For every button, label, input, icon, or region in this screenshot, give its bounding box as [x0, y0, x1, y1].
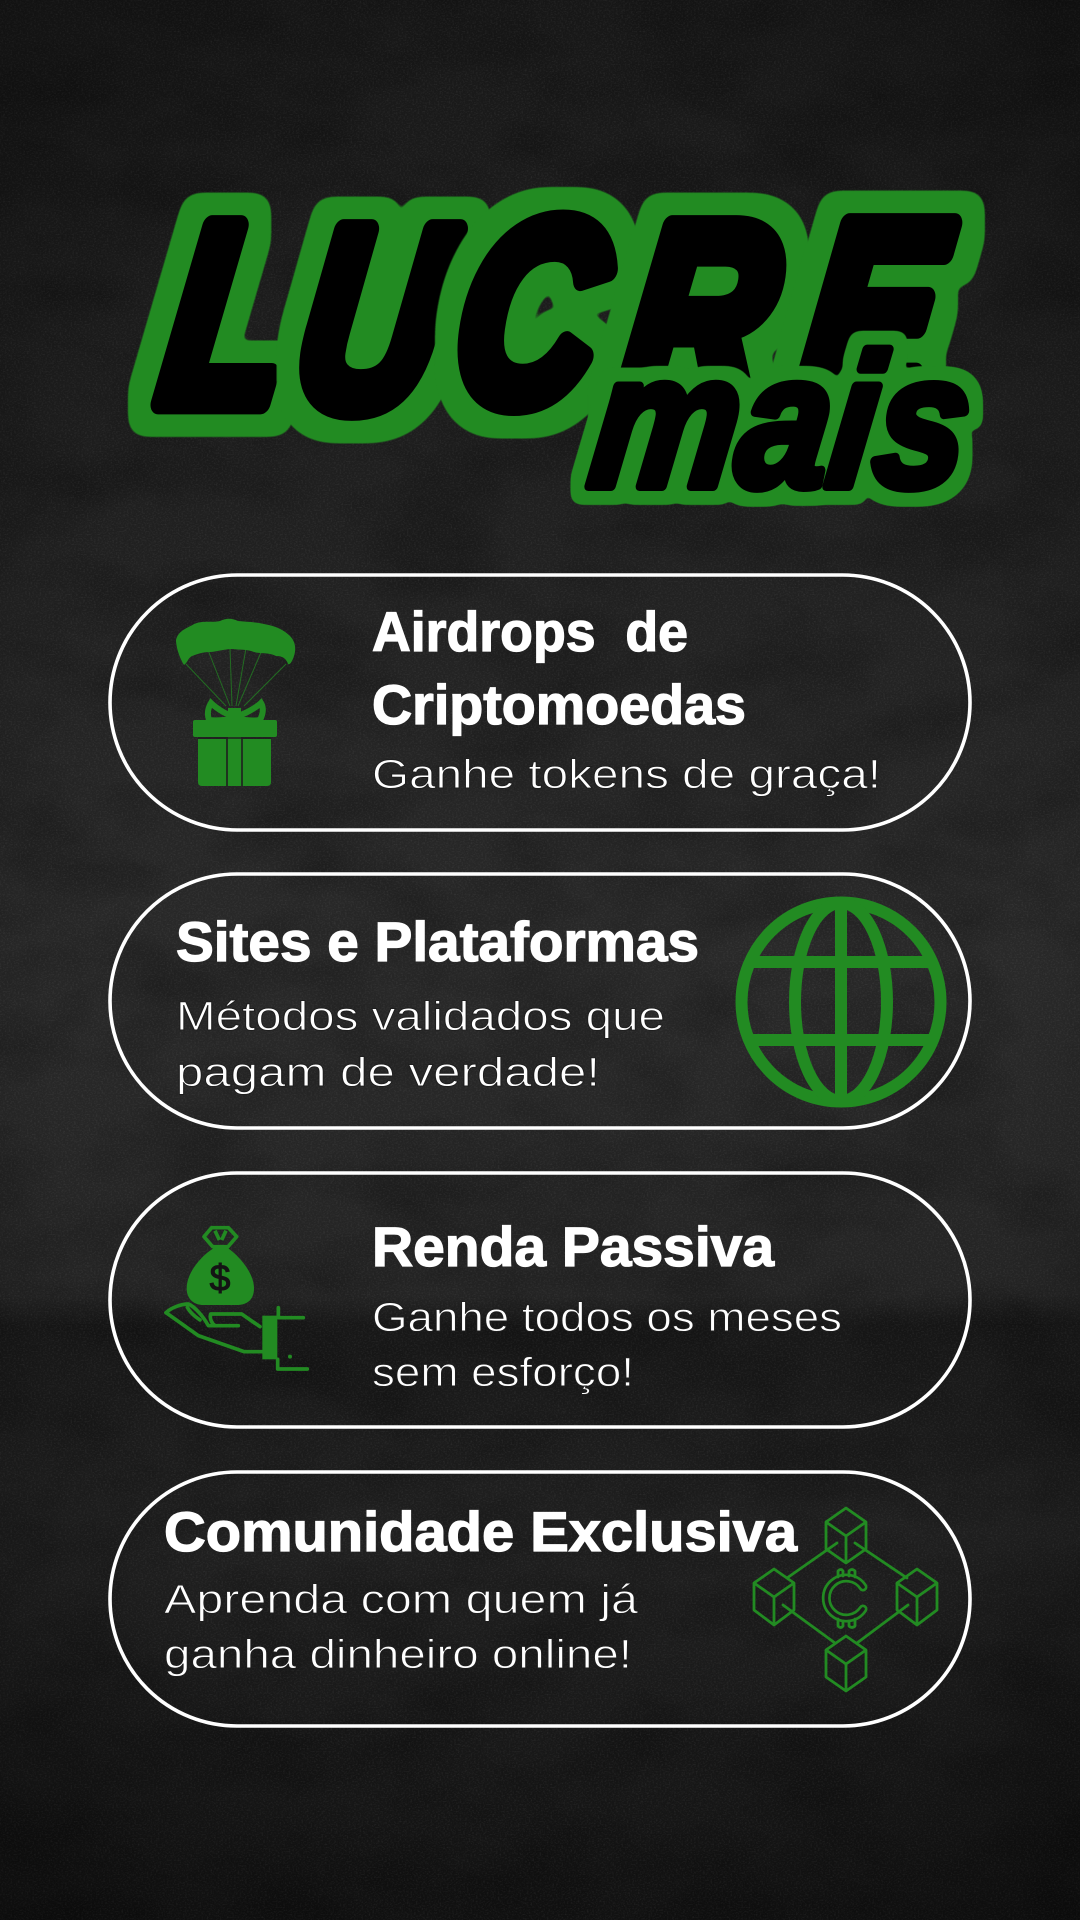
text: sites: Sites e Plataformas [176, 910, 699, 973]
logo: Lucre Mais: U [282, 175, 468, 462]
text: airdrops: Airdrops de [372, 600, 688, 663]
panel: sites e plataformas [110, 874, 970, 1128]
text: airdrops: Ganhe tokens de graça! [372, 751, 881, 797]
text: comunidade: ganha dinheiro online! [164, 1631, 632, 1677]
logo: Lucre Mais: C [440, 167, 624, 457]
icon: parachute with gift [176, 619, 295, 786]
logo: Lucre Mais: mais [581, 315, 982, 526]
logo: Lucre Mais: E [786, 168, 962, 458]
text: comunidade [164, 1500, 798, 1677]
text: renda passiva: Renda Passiva [372, 1215, 775, 1278]
panel: airdrops [110, 575, 970, 830]
logo: Lucre Mais [148, 167, 982, 526]
text: airdrops: Criptomoedas [372, 673, 746, 736]
text: renda passiva: Ganhe todos os meses [372, 1294, 842, 1340]
panel: renda passiva [110, 1173, 970, 1427]
icon: money bag on hand: $ [210, 1257, 231, 1299]
panel: comunidade exclusiva [110, 1472, 970, 1726]
logo: Lucre Mais: L [148, 172, 310, 458]
text: comunidade: Aprenda com quem já [164, 1576, 638, 1622]
text: sites: Métodos validados que [176, 993, 665, 1039]
text: airdrops [372, 600, 881, 797]
text: renda passiva: sem esforço! [372, 1349, 634, 1395]
icon: money bag on hand [166, 1228, 307, 1369]
text: comunidade: Comunidade Exclusiva [164, 1500, 798, 1563]
text: renda passiva [372, 1215, 842, 1395]
icon: globe [742, 902, 940, 1102]
text: sites: pagam de verdade! [176, 1049, 600, 1095]
logo: Lucre Mais: R [608, 172, 793, 458]
text: sites [176, 910, 699, 1095]
icon: blockchain network [754, 1508, 937, 1691]
